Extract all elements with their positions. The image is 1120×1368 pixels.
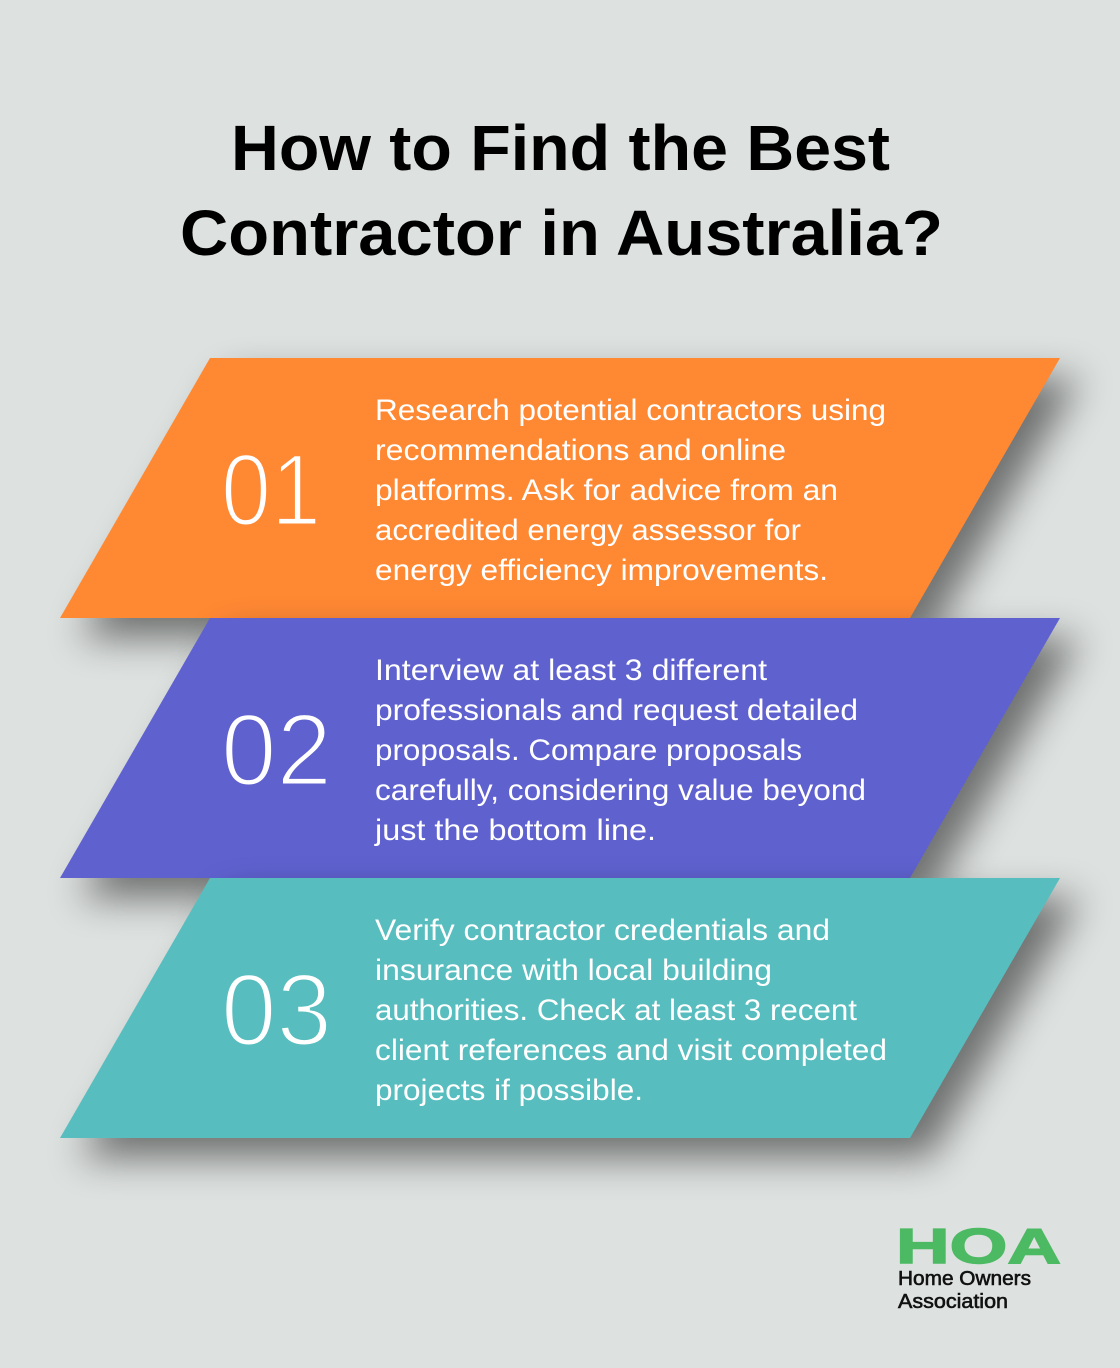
panel: step 02: proposals. Compare proposals: [375, 734, 802, 767]
panel: step 03: Verify contractor credentials and: [375, 914, 830, 947]
panel: step 03: client references and visit completed: [375, 1034, 887, 1067]
title: [180, 112, 943, 269]
panel: step 01: [60, 358, 1060, 618]
panel: step 01: recommendations and online: [375, 434, 786, 467]
panel: step 02: 02: [221, 693, 332, 807]
title: How to Find the Best: [231, 112, 890, 184]
panel: step 03: insurance with local building: [375, 954, 772, 987]
panel: step 02: [60, 618, 1060, 878]
panel: step 03: authorities. Check at least 3 recent: [375, 994, 858, 1027]
logo: HOA Home Owners Association: Association: [898, 1291, 1008, 1313]
panel: step 02: just the bottom line.: [374, 814, 656, 847]
panel: step 03: projects if possible.: [375, 1074, 643, 1107]
logo: HOA Home Owners Association: [896, 1220, 1061, 1313]
panel: step 01: platforms. Ask for advice from an: [375, 474, 838, 507]
panel: step 01: Research potential contractors using: [375, 394, 886, 427]
panel: step 01: energy efficiency improvements.: [375, 554, 828, 587]
logo: HOA Home Owners Association: Home Owners: [898, 1268, 1031, 1290]
logo: HOA Home Owners Association: HOA: [896, 1220, 1061, 1274]
panel: step 02: carefully, considering value beyond: [375, 774, 866, 807]
panel: step 01: accredited energy assessor for: [375, 514, 801, 547]
panel: step 02: Interview at least 3 different: [375, 654, 768, 687]
panel: step 03: [60, 878, 1060, 1138]
panel: step 02: professionals and request detailed: [375, 694, 858, 727]
title: Contractor in Australia?: [180, 197, 943, 269]
panel: step 03: 03: [221, 953, 332, 1067]
panel: step 01: 01: [221, 433, 321, 547]
